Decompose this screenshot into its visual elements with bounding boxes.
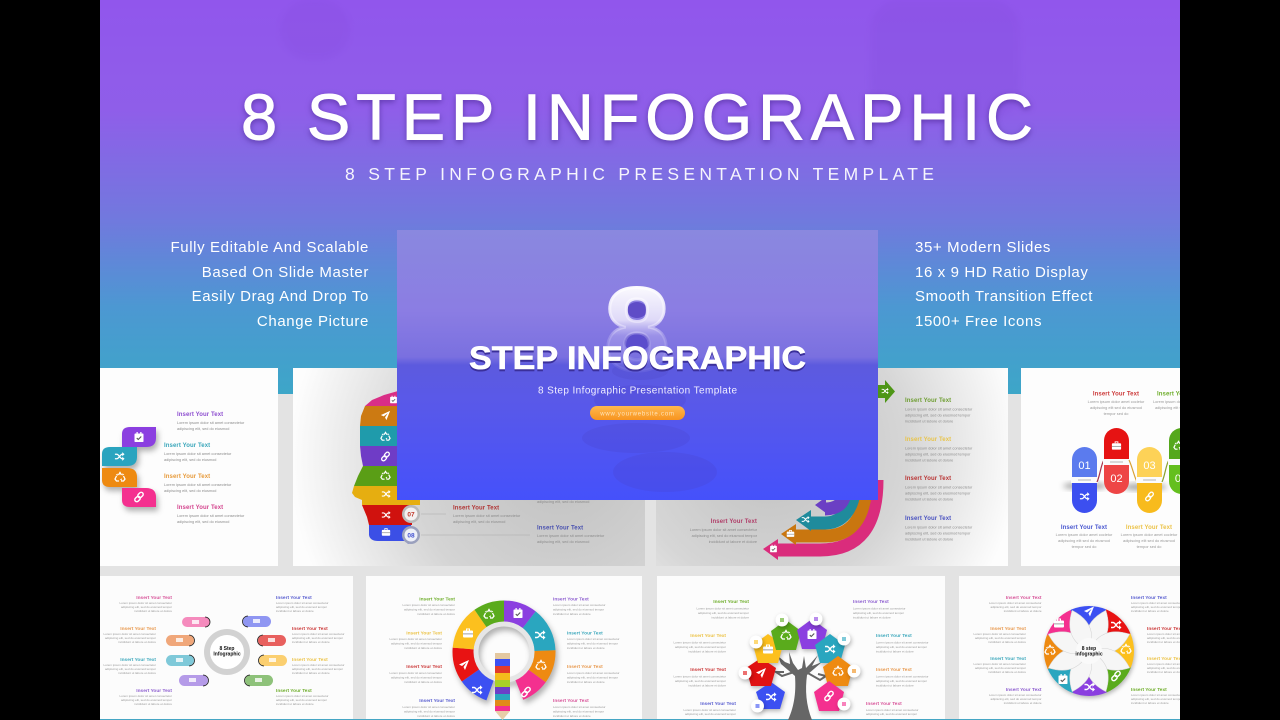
step texts: incididunt ut labore et dolore <box>134 702 172 706</box>
step texts: Lorem ipsum dolor sit amet consectetur <box>567 637 620 641</box>
step texts: Lorem ipsum dolor sit amet consectetur <box>690 528 758 532</box>
step texts: Insert Your Text <box>713 599 749 605</box>
step texts: adipiscing elit, sed do eiusmod tempor <box>391 642 442 646</box>
donut icons <box>459 608 546 698</box>
number badge 08: 08 <box>407 532 415 540</box>
step texts: incididunt ut labore et dolore <box>905 538 953 542</box>
center circle: Infographic <box>213 652 241 658</box>
step texts: adipiscing elit, sed do eiusmod tempor <box>975 636 1026 640</box>
step texts: Insert Your Text <box>406 664 442 670</box>
step texts: incididunt ut labore et dolore <box>553 612 591 616</box>
step texts: adipiscing elit, sed do eiusmod tempor <box>876 645 927 649</box>
step texts: Lorem ipsum dolor sit amet consectetur <box>402 705 455 709</box>
step texts: adipiscing elit, sed do eiusmod tempor <box>567 642 618 646</box>
step texts: incididunt ut labore et dolore <box>1131 701 1169 705</box>
title: 8 STEP INFOGRAPHIC <box>241 80 1033 154</box>
step texts: Lorem ipsum dolor sit amet consectetur <box>119 601 172 605</box>
step texts: Insert Your Text <box>876 667 912 673</box>
number badge 08 <box>402 526 420 544</box>
step texts: Lorem ipsum dolor sit amet consectetur <box>553 603 606 607</box>
feature list left: Fully Editable And Scalable <box>170 239 369 256</box>
donut chart <box>463 611 545 693</box>
wheel center label: 8 step <box>1082 646 1096 652</box>
step texts: adipiscing elit, sed do eiusmod tempor <box>1147 666 1198 670</box>
step texts: Lorem ipsum dolor sit amet consectetur <box>696 606 749 610</box>
step texts: incididunt ut labore et dolore <box>876 650 914 654</box>
step texts: adipiscing elit, sed do eiusmod <box>453 520 505 524</box>
step texts: adipiscing elit, sed do eiusmod tempor <box>692 534 758 538</box>
step texts: Insert Your Text <box>711 519 757 525</box>
capsule 02 <box>1103 428 1137 494</box>
step texts: Insert Your Text <box>1006 595 1042 601</box>
step texts: Insert Your Text <box>1131 687 1167 693</box>
step texts: adipiscing elit, sed do eiusmod tempor <box>276 698 327 702</box>
panel: center cover slide <box>397 230 878 500</box>
step texts: Lorem ipsum dolor sit amet consectetur <box>177 514 245 518</box>
step texts <box>690 398 973 544</box>
step texts: incididunt ut labore et dolore <box>417 714 455 718</box>
capsule 04 <box>1168 428 1195 494</box>
numeral holes <box>624 302 650 351</box>
step texts: Lorem ipsum dolor sit amet consectetur <box>973 632 1026 636</box>
capsule 03 <box>1136 447 1169 513</box>
step texts: adipiscing elit, sed do eiusmod tempor <box>853 611 904 615</box>
capsule 02: 02 <box>1110 473 1123 485</box>
step texts: incididunt ut labore et dolore <box>988 670 1026 674</box>
step texts: Lorem ipsum dolor sit amet consectetur <box>905 526 973 530</box>
step texts: Insert Your Text <box>866 701 902 707</box>
number badge 07 <box>402 505 420 523</box>
step texts: adipiscing elit, sed do eiusmod tempor <box>105 667 156 671</box>
capsule texts: Insert Your Text <box>1157 392 1203 398</box>
step texts <box>421 500 605 544</box>
step texts: Insert Your Text <box>905 516 951 522</box>
step texts: Lorem ipsum dolor sit amet consectetur <box>537 534 605 538</box>
step texts: incididunt ut labore et dolore <box>988 640 1026 644</box>
capsule texts: Lorem ipsum dolor amet cocletur <box>1121 532 1178 537</box>
step texts: Lorem ipsum dolor sit amet consectetur <box>905 446 973 450</box>
step texts <box>973 595 1200 705</box>
website button <box>590 406 685 420</box>
step texts: Insert Your Text <box>1147 656 1183 662</box>
step texts: Lorem ipsum dolor sit amet consectetur <box>905 486 973 490</box>
step texts: adipiscing elit, sed do eiusmod tempor <box>876 679 927 683</box>
step texts: Lorem ipsum dolor sit amet consectetur <box>164 483 232 487</box>
panel: slide 1 ribbon <box>100 368 278 566</box>
capsule texts: Lorem ipsum dolor amet cocletur <box>1088 399 1145 404</box>
step texts: Insert Your Text <box>120 626 156 632</box>
feature list left: Based On Slide Master <box>202 264 369 281</box>
feature list right <box>915 239 1093 330</box>
capsule 01 <box>1071 447 1104 513</box>
step texts: Insert Your Text <box>419 698 455 704</box>
center circle <box>204 629 250 675</box>
cover subtitle: 8 Step Infographic Presentation Template <box>538 386 737 396</box>
step texts: adipiscing elit, sed do eiusmod tempor <box>404 710 455 714</box>
step texts: Insert Your Text <box>567 664 603 670</box>
step texts: Insert Your Text <box>276 595 312 601</box>
step texts: adipiscing elit, sed do eiusmod tempor <box>905 452 971 456</box>
step texts: Lorem ipsum dolor sit amet consectetur <box>989 693 1042 697</box>
step texts: Insert Your Text <box>292 657 328 663</box>
step texts: Insert Your Text <box>177 412 223 418</box>
step texts: Insert Your Text <box>537 526 583 532</box>
step texts: incididunt ut labore et dolore <box>567 680 605 684</box>
step texts: adipiscing elit, sed do eiusmod tempor <box>1147 636 1198 640</box>
step texts: incididunt ut labore et dolore <box>404 646 442 650</box>
step texts: Lorem ipsum dolor sit amet consectetur <box>103 663 156 667</box>
capsule texts: adipiscing elit sed do eiusmod <box>1123 538 1175 543</box>
step texts: Insert Your Text <box>553 596 589 602</box>
panel: slide 3 curved arrows <box>656 368 1008 566</box>
step texts: adipiscing elit, sed do eiusmod tempor <box>105 636 156 640</box>
feature list left: Easily Drag And Drop To <box>192 288 369 305</box>
panel: slide 4 capsules <box>1021 368 1210 566</box>
step texts: Insert Your Text <box>905 398 951 404</box>
step texts: Insert Your Text <box>905 437 951 443</box>
step texts: Lorem ipsum dolor sit amet consectetur <box>292 663 345 667</box>
step texts: adipiscing elit, sed do eiusmod <box>537 540 589 544</box>
feature list right: Smooth Transition Effect <box>915 288 1093 305</box>
wheel center label: infographic <box>1075 652 1103 658</box>
step texts: adipiscing elit, sed do eiusmod tempor <box>553 710 604 714</box>
step texts: Lorem ipsum dolor sit amet consectetur <box>276 601 329 605</box>
step texts: Lorem ipsum dolor sit amet consectetur <box>673 640 726 644</box>
step texts: incididunt ut labore et dolore <box>1147 640 1185 644</box>
step texts: adipiscing elit, sed do eiusmod tempor <box>391 676 442 680</box>
step texts: incididunt ut labore et dolore <box>1131 609 1169 613</box>
step texts: incididunt ut labore et dolore <box>688 650 726 654</box>
head stripes <box>352 391 420 544</box>
step texts: incididunt ut labore et dolore <box>853 616 891 620</box>
capsule texts: tempor sed do <box>1072 544 1096 549</box>
step texts: adipiscing elit, sed do eiusmod tempor <box>404 608 455 612</box>
step texts: adipiscing elit, sed do eiusmod tempor <box>567 676 618 680</box>
step texts: Lorem ipsum dolor sit amet consectetur <box>673 674 726 678</box>
step texts: incididunt ut labore et dolore <box>118 640 156 644</box>
step texts: Insert Your Text <box>690 633 726 639</box>
step texts: Lorem ipsum dolor sit amet consectetur <box>402 603 455 607</box>
step texts: Insert Your Text <box>1147 626 1183 632</box>
step texts: adipiscing elit, sed do eiusmod tempor <box>553 608 604 612</box>
step texts: Insert Your Text <box>690 667 726 673</box>
step texts <box>164 412 245 524</box>
step texts: Lorem ipsum dolor sit amet consectetur <box>905 408 973 412</box>
step texts: Insert Your Text <box>292 626 328 632</box>
large numeral 8: 8 <box>604 264 670 396</box>
white number badges <box>738 612 860 712</box>
panel: slide 6 donut and pencil <box>366 576 642 720</box>
cover heading: STEP INFOGRAPHIC <box>469 340 806 376</box>
capsule texts: Lorem ipsum dolor amet cocletur <box>1056 532 1113 537</box>
step texts: incididunt ut labore et dolore <box>118 671 156 675</box>
step texts: Lorem ipsum dolor sit amet consectetur <box>866 708 919 712</box>
capsule 03: 03 <box>1143 460 1156 472</box>
step texts: adipiscing elit, sed do eiusmod tempor <box>1131 697 1182 701</box>
white petals <box>1045 607 1133 695</box>
step texts: incididunt ut labore et dolore <box>276 609 314 613</box>
step texts: adipiscing elit, sed do eiusmod tempor <box>990 697 1042 701</box>
step texts: adipiscing elit, sed do eiusmod tempor <box>905 492 971 496</box>
step texts <box>103 595 345 706</box>
panel: slide 5 central circle with pills <box>100 576 353 719</box>
step texts: Insert Your Text <box>453 506 499 512</box>
capsule 01: 01 <box>1078 460 1091 472</box>
step texts: incididunt ut labore et dolore <box>1004 701 1042 705</box>
step texts: adipiscing elit, sed do eiusmod tempor <box>685 712 736 716</box>
feature list right: 1500+ Free Icons <box>915 313 1042 330</box>
step texts: adipiscing elit, sed do eiusmod tempor <box>975 666 1026 670</box>
step texts: adipiscing elit, sed do eiusmod tempor <box>121 605 172 609</box>
step texts: Lorem ipsum dolor sit amet consectetur <box>103 632 156 636</box>
capsule texts: adipiscing elit sed do eiusmod <box>1155 405 1207 410</box>
step texts: Insert Your Text <box>876 633 912 639</box>
step texts: Insert Your Text <box>419 596 455 602</box>
step texts: Lorem ipsum dolor sit amet consectetur <box>876 674 929 678</box>
subtitle: 8 STEP INFOGRAPHIC PRESENTATION TEMPLATE <box>345 164 934 184</box>
step texts: adipiscing elit, sed do eiusmod tempor <box>121 698 172 702</box>
feature list left: Change Picture <box>257 313 369 330</box>
wheel center label <box>1075 646 1103 658</box>
step texts: incididunt ut labore et dolore <box>276 702 314 706</box>
step texts: Insert Your Text <box>1006 687 1042 693</box>
step texts: adipiscing elit, sed do eiusmod <box>177 427 229 431</box>
wheel segments <box>1060 622 1118 680</box>
capsule texts: Insert Your Text <box>1061 525 1107 531</box>
step texts: Lorem ipsum dolor sit amet consectetur <box>1147 632 1200 636</box>
panel: slide 2 head <box>293 368 645 566</box>
step texts: adipiscing elit, sed do eiusmod tempor <box>990 605 1042 609</box>
capsule texts: Lorem ipsum dolor amet cocletur <box>1153 399 1210 404</box>
step texts: incididunt ut labore et dolore <box>688 684 726 688</box>
stacked stones reflection <box>582 362 717 492</box>
website button: www.yourwebsite.com <box>599 412 675 418</box>
step texts: Insert Your Text <box>853 599 889 605</box>
step texts: Lorem ipsum dolor sit amet consectetur <box>1131 693 1184 697</box>
panel: slide 8 flower wheel <box>959 576 1200 719</box>
step texts: adipiscing elit, sed do eiusmod <box>537 500 589 504</box>
step texts <box>389 596 620 718</box>
step texts: Insert Your Text <box>136 595 172 601</box>
step texts: Insert Your Text <box>905 476 951 482</box>
capsule texts: tempor sed do <box>1137 544 1161 549</box>
step texts: incididunt ut labore et dolore <box>134 609 172 613</box>
step texts: incididunt ut labore et dolore <box>292 671 330 675</box>
step texts: Insert Your Text <box>1131 595 1167 601</box>
step texts: incididunt ut labore et dolore <box>417 612 455 616</box>
step texts: incididunt ut labore et dolore <box>711 616 749 620</box>
step texts: incididunt ut labore et dolore <box>1004 609 1042 613</box>
step texts: incididunt ut labore et dolore <box>905 458 953 462</box>
step texts: incididunt ut labore et dolore <box>709 540 757 544</box>
step texts: incididunt ut labore et dolore <box>567 646 605 650</box>
step texts <box>673 599 929 716</box>
step texts: incididunt ut labore et dolore <box>404 680 442 684</box>
step texts: Lorem ipsum dolor sit amet consectetur <box>453 514 521 518</box>
capsule texts <box>1056 392 1210 549</box>
step texts: Lorem ipsum dolor sit amet consectetur <box>292 632 345 636</box>
step texts: incididunt ut labore et dolore <box>905 420 953 424</box>
step texts: Lorem ipsum dolor sit amet consectetur <box>853 606 906 610</box>
step texts: Lorem ipsum dolor sit amet consectetur <box>553 705 606 709</box>
step texts: Insert Your Text <box>406 630 442 636</box>
step texts: Insert Your Text <box>120 657 156 663</box>
step texts: Lorem ipsum dolor sit amet consectetur <box>876 640 929 644</box>
step texts: Insert Your Text <box>164 474 210 480</box>
step texts: incididunt ut labore et dolore <box>292 640 330 644</box>
step texts: Insert Your Text <box>553 698 589 704</box>
step texts: adipiscing elit, sed do eiusmod tempor <box>698 611 749 615</box>
step texts: Lorem ipsum dolor sit amet consectetur <box>389 671 442 675</box>
step texts: Lorem ipsum dolor sit amet consectetur <box>389 637 442 641</box>
step texts: Lorem ipsum dolor sit amet consectetur <box>1131 601 1184 605</box>
capsule texts: adipiscing elit sed do eiusmod <box>1058 538 1110 543</box>
step texts: Insert Your Text <box>700 701 736 707</box>
step texts: Lorem ipsum dolor sit amet consectetur <box>567 671 620 675</box>
step texts: adipiscing elit, sed do eiusmod <box>164 458 216 462</box>
step texts: Lorem ipsum dolor sit amet consectetur <box>973 662 1026 666</box>
capsule texts: Insert Your Text <box>1093 392 1139 398</box>
step texts: adipiscing elit, sed do eiusmod <box>177 520 229 524</box>
step texts: Lorem ipsum dolor sit amet consectetur <box>683 708 736 712</box>
tree <box>776 652 826 720</box>
step texts: adipiscing elit, sed do eiusmod tempor <box>866 712 917 716</box>
step texts: Lorem ipsum dolor sit amet consectetur <box>119 694 172 698</box>
pills <box>166 616 287 686</box>
arrows <box>763 380 895 560</box>
panel: slide 7 tree <box>657 576 945 720</box>
step texts: Insert Your Text <box>164 443 210 449</box>
number badge 07: 07 <box>407 512 415 518</box>
step texts: incididunt ut labore et dolore <box>1147 670 1185 674</box>
step texts: adipiscing elit, sed do eiusmod tempor <box>905 414 971 418</box>
capsule 04: 04 <box>1175 473 1187 485</box>
step texts: Lorem ipsum dolor sit amet consectetur <box>989 601 1042 605</box>
step texts: Lorem ipsum dolor sit amet consectetur <box>177 421 245 425</box>
step texts: incididunt ut labore et dolore <box>905 498 953 502</box>
feature list right: 16 x 9 HD Ratio Display <box>915 264 1088 281</box>
capsule texts: adipiscing elit sed do eiusmod <box>1090 405 1142 410</box>
wheel icons <box>1045 606 1131 692</box>
step texts: adipiscing elit, sed do eiusmod tempor <box>292 667 343 671</box>
capsule texts: Insert Your Text <box>1126 525 1172 531</box>
step texts: Insert Your Text <box>990 626 1026 632</box>
capsule texts: tempor sed do <box>1104 411 1128 416</box>
step texts: adipiscing elit, sed do eiusmod tempor <box>292 636 343 640</box>
step texts: Insert Your Text <box>177 505 223 511</box>
step texts: incididunt ut labore et dolore <box>553 714 591 718</box>
step texts: Insert Your Text <box>136 688 172 694</box>
pencil <box>495 653 510 720</box>
step texts: adipiscing elit, sed do eiusmod <box>164 489 216 493</box>
ribbon steps <box>102 427 156 507</box>
step texts: adipiscing elit, sed do eiusmod tempor <box>675 645 726 649</box>
step texts: Insert Your Text <box>567 630 603 636</box>
step texts: incididunt ut labore et dolore <box>876 684 914 688</box>
step texts: adipiscing elit, sed do eiusmod tempor <box>675 679 726 683</box>
step texts: Insert Your Text <box>990 656 1026 662</box>
step texts: Insert Your Text <box>276 688 312 694</box>
center circle: 8 Step <box>219 646 235 652</box>
feature list right: 35+ Modern Slides <box>915 239 1051 256</box>
step texts: Lorem ipsum dolor sit amet consectetur <box>164 452 232 456</box>
step texts: Lorem ipsum dolor sit amet consectetur <box>276 694 329 698</box>
pentagons <box>746 619 853 711</box>
step texts: Lorem ipsum dolor sit amet consectetur <box>1147 662 1200 666</box>
step texts: adipiscing elit, sed do eiusmod tempor <box>905 532 971 536</box>
step texts: adipiscing elit, sed do eiusmod tempor <box>276 605 327 609</box>
feature list left <box>170 239 369 330</box>
step texts: adipiscing elit, sed do eiusmod tempor <box>1131 605 1182 609</box>
